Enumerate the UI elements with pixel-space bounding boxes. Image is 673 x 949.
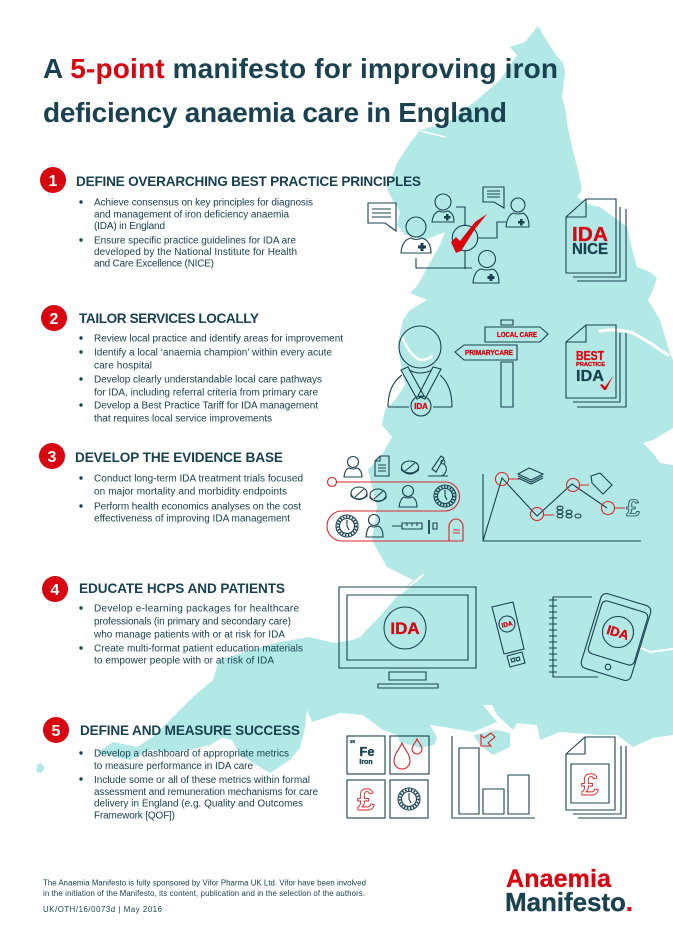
footer disclaimer: The Anaemia Manifesto is fully sponsored by Vifor Pharma UK Ltd. Vifor have been involved — [43, 878, 366, 888]
bullet list 2: that requires local service improvements — [94, 414, 272, 424]
icon: USB stick: IDA — [501, 620, 514, 630]
icon: coins — [557, 506, 581, 518]
icon: patient pathway timeline — [327, 456, 463, 541]
section 1: best practice principles — [40, 167, 626, 283]
icon: best practice IDA document: PRACTICE — [576, 362, 606, 368]
icon: IDA NICE document: NICE — [572, 241, 608, 258]
icon: IDA NICE document: IDA — [572, 224, 608, 246]
icon: computer monitor: IDA — [390, 619, 420, 638]
icon: tablet — [580, 592, 652, 682]
bullet list 5: Include some or all of these metrics within formal — [94, 775, 310, 786]
bullet list 1: Ensure specific practice guidelines for IDA are — [94, 236, 296, 246]
bullet list 2: Develop clearly understandable local care pathways — [94, 374, 322, 386]
icon: pound document — [566, 737, 626, 818]
icon: pound tile — [347, 780, 385, 818]
icon: tablet: IDA — [605, 622, 631, 643]
bullet list 2 — [79, 334, 343, 424]
bullet list 1: (IDA) in England — [94, 221, 165, 232]
background map of England — [37, 26, 673, 773]
footer disclaimer: UK/OTH/16/0073d | May 2016 — [43, 905, 162, 914]
number badge 3 — [39, 443, 65, 469]
bullet list 1 — [79, 198, 313, 270]
heading 1: DEFINE OVERARCHING BEST PRACTICE PRINCIPLES — [76, 174, 421, 189]
icon: iron element tile: Iron — [359, 759, 373, 766]
icon: clock tile — [390, 780, 428, 818]
bullet list 1: and management of iron deficiency anaemia — [94, 210, 289, 220]
number badge 5: 5 — [52, 723, 61, 740]
heading 5: DEFINE AND MEASURE SUCCESS — [80, 723, 300, 738]
bullet list 5: Framework [QOF]) — [94, 810, 175, 822]
icon: price tag — [591, 473, 612, 494]
section 5: define and measure success — [43, 717, 626, 822]
icon: notebook — [549, 597, 598, 677]
number badge 2 — [41, 305, 67, 331]
logo: Anaemia Manifesto: Manifesto. — [505, 887, 633, 917]
icon: signpost: LOCAL CARE — [497, 332, 537, 339]
bullet list 4 — [79, 604, 303, 666]
number badge 4 — [42, 576, 68, 602]
number badge 2: 2 — [50, 311, 59, 328]
icon: signpost — [455, 320, 548, 407]
bullet list 3: on major mortality and morbidity endpoints — [94, 486, 287, 498]
bullet list 2: care hospital — [94, 360, 152, 372]
number badge 5 — [43, 717, 69, 743]
title — [43, 53, 558, 128]
bullet list 4: to empower people with or at risk of IDA — [94, 656, 274, 666]
bullet list 3 — [79, 474, 303, 524]
icon: best practice IDA document: BEST — [576, 348, 604, 363]
section 4: educate HCPs and patients — [42, 576, 652, 688]
bullet list 2: Identify a local ‘anaemia champion’ within every acute — [94, 348, 332, 358]
bullet list 5: to measure performance in IDA care — [94, 761, 253, 772]
bullet list 4: Create multi-format patient education materials — [94, 644, 303, 654]
bullet list 3: Conduct long-term IDA treatment trials focused — [94, 474, 303, 484]
bullet list 1: and Care Excellence (NICE) — [94, 258, 214, 270]
bullet list 4: who manage patients with or at risk for IDA — [93, 630, 285, 640]
icon: USB stick — [492, 602, 525, 667]
heading 3: DEVELOP THE EVIDENCE BASE — [75, 450, 283, 465]
bullet list 2: for IDA, including referral criteria from primary care — [94, 388, 318, 398]
bullet list 4: Develop e-learning packages for healthcare — [94, 604, 299, 614]
icon: pound tile: £ — [357, 782, 375, 817]
bullet list 5: Develop a dashboard of appropriate metrics — [94, 748, 289, 760]
icon: banknotes — [518, 468, 543, 484]
icon: pound document: £ — [581, 767, 599, 802]
number badge 4: 4 — [51, 582, 60, 599]
icon: iron element tile: Fe — [359, 744, 375, 759]
icon: pound sign: £ — [626, 495, 640, 522]
chart: bar chart with down arrow — [452, 733, 535, 818]
icon: best practice IDA document: IDA — [576, 368, 604, 385]
icon: signpost: PRIMARYCARE — [465, 350, 513, 357]
icon: clinicians network with tick — [368, 187, 529, 283]
icon: blood drops tile — [390, 736, 429, 774]
icon: iron element tile: 26 — [350, 739, 356, 744]
bullet list 1: developed by the National Institute for Health — [94, 247, 297, 258]
icon: best practice IDA document — [566, 325, 626, 407]
bullet list 2: Develop a Best Practice Tariff for IDA management — [94, 400, 318, 412]
bullet list 5 — [79, 748, 318, 822]
footer disclaimer: in the initiation of the Manifesto, its content, publication and in the selection of the authors. — [43, 889, 365, 898]
bullet list 4: professionals (in primary and secondary care) — [94, 616, 291, 628]
icon: anaemia champion with medal — [388, 326, 452, 416]
bullet list 3: Perform health economics analyses on the cost — [94, 502, 301, 512]
footer disclaimer — [43, 878, 366, 914]
title: A 5-point manifesto for improving iron — [43, 53, 558, 84]
bullet list 1: Achieve consensus on key principles for diagnosis — [94, 198, 313, 208]
chart: cost line graph — [483, 468, 641, 541]
icon: computer monitor — [339, 587, 476, 688]
logo: Anaemia Manifesto — [505, 865, 633, 917]
bullet list 5: delivery in England (e.g. Quality and Outcomes — [94, 798, 303, 810]
heading 2: TAILOR SERVICES LOCALLY — [79, 311, 259, 326]
icon: IDA NICE document — [566, 199, 626, 281]
number badge 1: 1 — [49, 173, 58, 190]
bullet list 5: assessment and remuneration mechanisms for care — [94, 787, 318, 798]
number badge 3: 3 — [48, 449, 57, 466]
section 3: evidence base — [39, 443, 641, 541]
section 2: tailor services locally — [41, 305, 626, 424]
heading 4: EDUCATE HCPS AND PATIENTS — [79, 581, 285, 596]
icon: iron element tile — [347, 736, 385, 774]
bullet list 2: Review local practice and identify areas for improvement — [94, 334, 343, 344]
icon: anaemia champion with medal: IDA — [414, 402, 428, 411]
title: deficiency anaemia care in England — [43, 97, 507, 128]
logo: Anaemia Manifesto: Anaemia — [506, 865, 612, 893]
number badge 1 — [40, 167, 66, 193]
bullet list 3: effectiveness of improving IDA management — [94, 514, 290, 524]
